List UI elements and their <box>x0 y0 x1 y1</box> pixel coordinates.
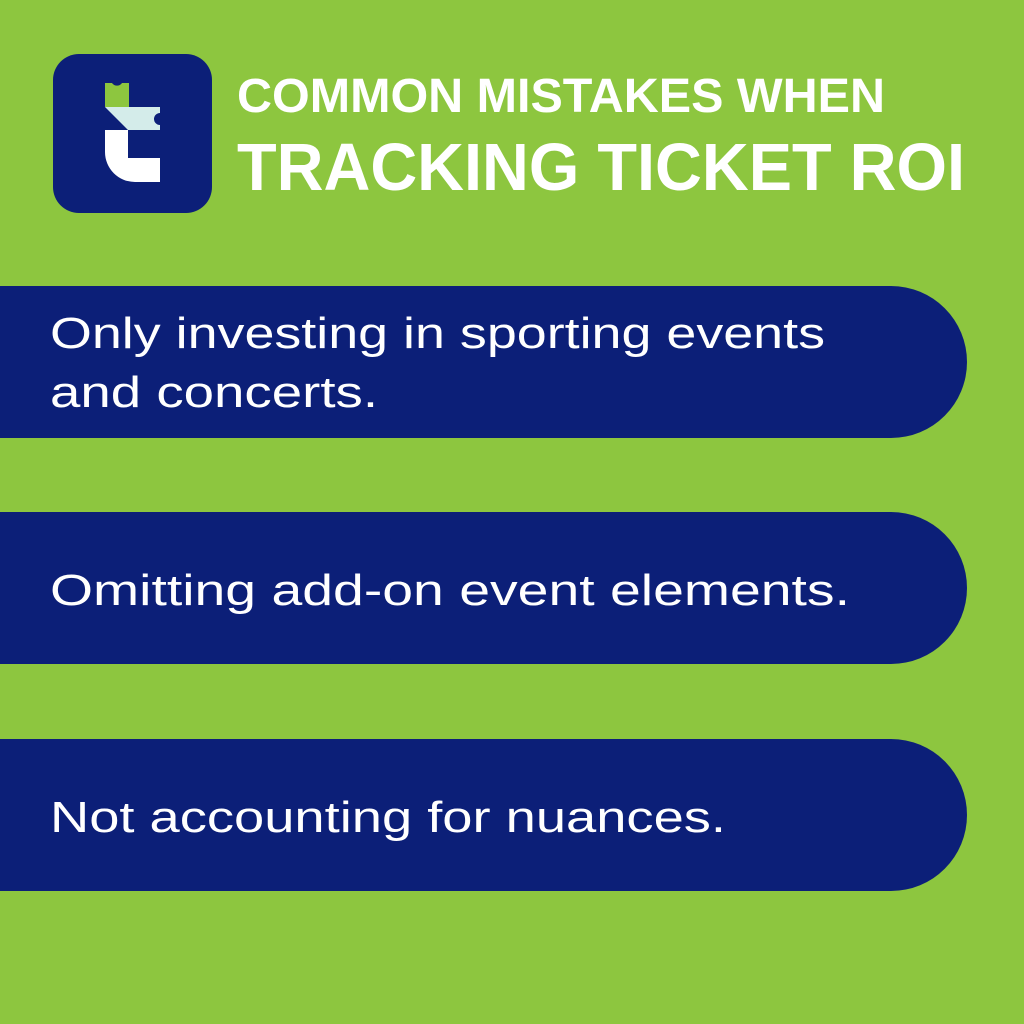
title <box>237 70 965 205</box>
panel: mistake 2 <box>0 512 967 664</box>
panel: mistake 3 <box>0 739 967 891</box>
panel: mistake 1: and concerts. <box>50 368 378 417</box>
title: COMMON MISTAKES WHEN <box>237 70 885 123</box>
panel: mistake 3: Not accounting for nuances. <box>50 793 726 842</box>
panel: mistake 1 <box>0 286 967 438</box>
panel: mistake 1: Only investing in sporting events <box>50 309 825 358</box>
icon: logo <box>53 54 212 213</box>
panel: mistake 2: Omitting add-on event elements. <box>50 566 850 615</box>
title: TRACKING TICKET ROI <box>237 130 965 205</box>
